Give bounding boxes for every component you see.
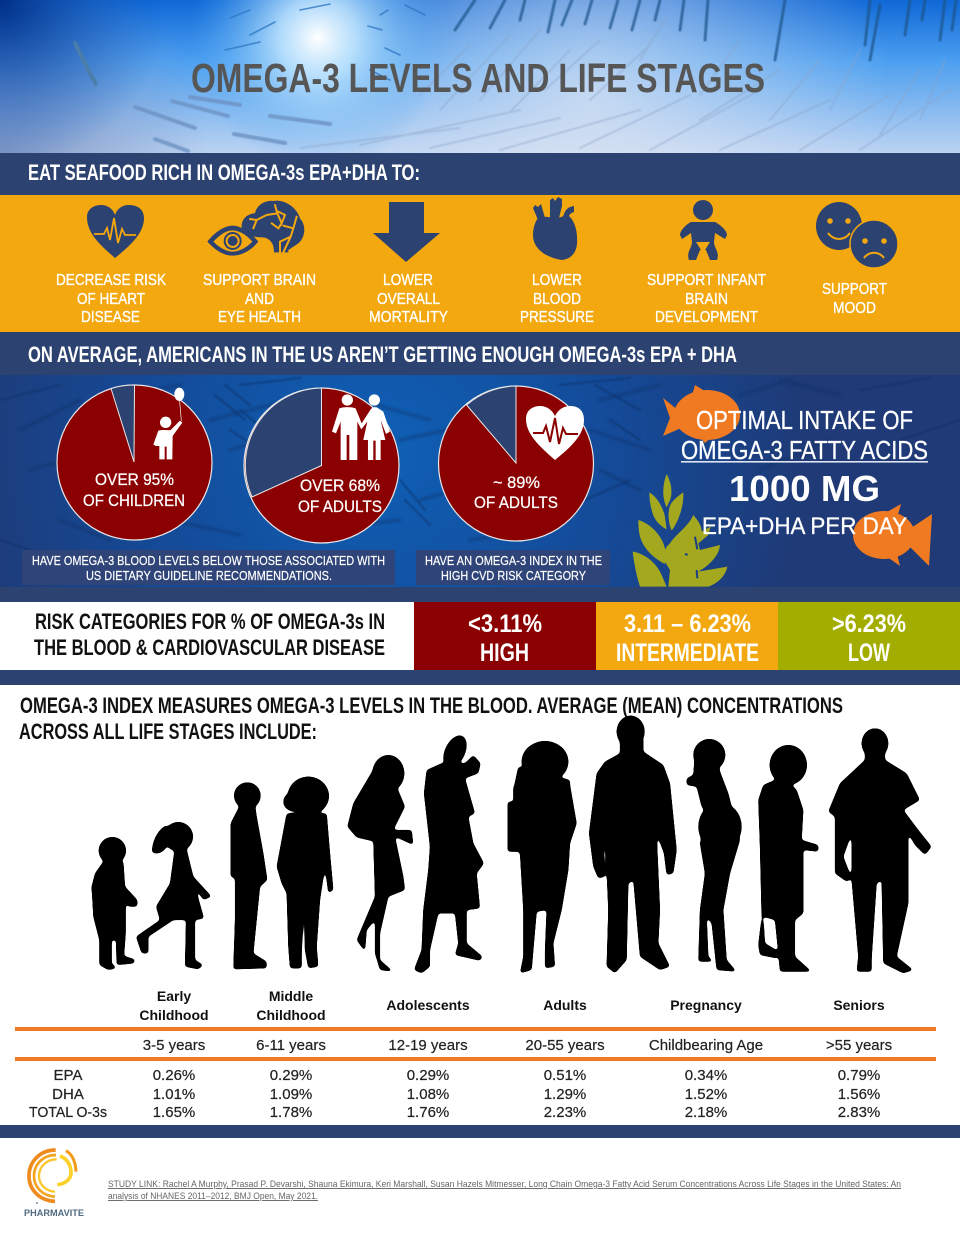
panel: risk categories: [0, 602, 960, 670]
table row: DHA: 1.29%: [544, 1086, 586, 1103]
heading: omega-3 index: [19, 693, 843, 744]
icon: down arrow: [373, 202, 440, 262]
table row: DHA: 1.52%: [685, 1086, 727, 1103]
benefit label: heart disease: OF HEART: [77, 291, 145, 308]
risk cell: intermediate: 3.11 – 6.23%: [624, 610, 751, 638]
icon: brain and eye: [207, 201, 304, 256]
risk cell: intermediate: INTERMEDIATE: [616, 639, 759, 667]
benefit label: mortality: OVERALL: [377, 291, 440, 308]
silhouettes: children and adolescents: [92, 732, 484, 973]
risk cell: low: LOW: [848, 639, 890, 667]
silhouettes: adults, pregnancy and seniors: [508, 716, 932, 973]
table row: DHA: 1.56%: [838, 1086, 880, 1103]
table row: total omega-3s: 1.65%: [153, 1104, 195, 1121]
icon: anatomical heart: [533, 197, 577, 260]
silhouette: pregnant woman: [687, 739, 742, 972]
icon: seaweed: [633, 474, 727, 587]
table row: EPA: 0.51%: [544, 1067, 586, 1084]
table ages row: 3-5 years: [143, 1037, 205, 1054]
table header: Childhood: [139, 1007, 209, 1023]
table ages row: 6-11 years: [256, 1037, 326, 1054]
pie: about 89% of adults: OF ADULTS: [474, 493, 558, 512]
caption: omega-3 index: [416, 550, 610, 585]
study link citation: analysis of NHANES 2011–2012, BMJ Open, May 2021.: [108, 1191, 318, 1202]
pie: over 95% of children: [57, 385, 212, 540]
table row: DHA: 1.08%: [407, 1086, 449, 1103]
table row: EPA: 0.79%: [838, 1067, 880, 1084]
benefit label: heart disease: DECREASE RISK: [56, 272, 166, 289]
table row: EPA: [54, 1067, 880, 1084]
table ages row: >55 years: [826, 1037, 892, 1054]
optimal intake callout: OPTIMAL INTAKE OF: [696, 405, 913, 435]
table row: EPA: 0.29%: [270, 1067, 312, 1084]
silhouette: senior man: [828, 728, 932, 973]
table ages row: 12-19 years: [388, 1037, 468, 1054]
table ages row: [143, 1037, 892, 1054]
benefit label: brain and eye: SUPPORT BRAIN: [203, 272, 316, 289]
icon: baby: [680, 200, 727, 260]
table header: Middle: [269, 988, 313, 1004]
table row: DHA: [52, 1086, 880, 1103]
risk cell: high: HIGH: [480, 639, 529, 667]
icon: orange fish top: [663, 385, 740, 443]
icon: happy and sad faces: [816, 202, 898, 268]
icon: couple: [332, 394, 390, 460]
silhouette: toddler: [92, 837, 137, 970]
benefit label: mood: MOOD: [833, 300, 876, 317]
benefit label: infant development: BRAIN: [685, 291, 728, 308]
logo: Pharmavite: [24, 1150, 84, 1219]
pie: over 95% of children: OF CHILDREN: [83, 491, 185, 510]
pie: over 68% of adults: OF ADULTS: [298, 497, 382, 516]
table header: Early: [157, 988, 191, 1004]
silhouette: senior woman: [758, 745, 818, 972]
header banner: [0, 0, 960, 153]
table row: EPA: 0.26%: [153, 1067, 195, 1084]
band: separator: [0, 670, 960, 685]
table row: total omega-3s: 2.83%: [838, 1104, 880, 1121]
benefit label: heart disease: [56, 272, 166, 326]
benefit label: mortality: LOWER: [383, 272, 433, 289]
band: eat seafood heading: [0, 153, 960, 195]
table row: total omega-3s: TOTAL O-3s: [29, 1104, 107, 1121]
risk cell: intermediate: [596, 602, 778, 670]
band: separator: [0, 587, 960, 602]
table row: total omega-3s: [29, 1104, 880, 1121]
silhouette: boy: [231, 782, 267, 969]
pie: over 68% of adults: [244, 388, 399, 543]
table row: DHA: 1.09%: [270, 1086, 312, 1103]
silhouette: adult woman: [508, 741, 577, 973]
table row: total omega-3s: 2.18%: [685, 1104, 727, 1121]
logo: Pharmavite: PHARMAVITE: [24, 1208, 84, 1219]
table header: Pregnancy: [670, 997, 742, 1013]
benefit label: blood pressure: [520, 272, 594, 326]
table ages row: 20-55 years: [525, 1037, 605, 1054]
table row: DHA: DHA: [52, 1086, 84, 1103]
panel: risk categories: RISK CATEGORIES FOR % OF OMEGA-3s IN: [35, 609, 385, 634]
benefit label: blood pressure: LOWER: [532, 272, 582, 289]
caption: blood levels: [22, 550, 395, 585]
panel: benefits: [0, 195, 960, 332]
silhouette: young girl: [136, 822, 212, 969]
panel: ocean statistics: [0, 375, 960, 587]
benefit label: mortality: [369, 272, 448, 326]
band: footer divider: [0, 1125, 960, 1138]
benefit label: brain and eye: AND: [245, 291, 274, 308]
benefit label: mood: SUPPORT: [822, 281, 887, 298]
table row: EPA: 0.34%: [685, 1067, 727, 1084]
pie: about 89% of adults: ~ 89%: [493, 473, 540, 492]
benefit label: mood: [822, 281, 887, 317]
caption: omega-3 index: HAVE AN OMEGA-3 INDEX IN THE: [425, 554, 602, 568]
pie: over 68% of adults: OVER 68%: [300, 476, 380, 495]
optimal intake callout: [681, 405, 928, 540]
optimal intake callout: 1000 MG: [729, 468, 880, 509]
table row: EPA: 0.29%: [407, 1067, 449, 1084]
risk cell: low: [778, 602, 960, 670]
benefit label: brain and eye: [203, 272, 316, 326]
table ages row: Childbearing Age: [649, 1037, 763, 1054]
silhouette: older girl: [277, 777, 333, 968]
table row: total omega-3s: 1.76%: [407, 1104, 449, 1121]
band: americans not getting enough: ON AVERAGE, AMERICANS IN THE US AREN’T GETTING ENOUGH OMEGA-3s EPA + DHA: [28, 342, 737, 367]
table header: Adults: [543, 997, 587, 1013]
pie: about 89% of adults: [438, 386, 594, 541]
benefit label: mortality: MORTALITY: [369, 309, 448, 326]
icon: child with balloon: [153, 388, 184, 459]
table header: Adolescents: [386, 997, 470, 1013]
table header: Childhood: [256, 1007, 326, 1023]
study link citation: [108, 1179, 901, 1202]
benefit label: brain and eye: EYE HEALTH: [218, 309, 301, 326]
heading: omega-3 index: ACROSS ALL LIFE STAGES INCLUDE:: [19, 719, 317, 744]
silhouette: adolescent girl: [347, 755, 413, 972]
table row: DHA: 1.01%: [153, 1086, 195, 1103]
benefit label: infant development: DEVELOPMENT: [655, 309, 758, 326]
silhouette: adult man: [589, 716, 677, 973]
optimal intake callout: EPA+DHA PER DAY: [702, 513, 907, 540]
benefit label: heart disease: DISEASE: [81, 309, 140, 326]
table header: Seniors: [833, 997, 885, 1013]
icon: orange fish bottom: [853, 504, 932, 566]
icon: heart with pulse: [87, 205, 144, 258]
silhouette: adolescent boy: [414, 732, 484, 973]
table header: [139, 988, 885, 1023]
benefit label: infant development: SUPPORT INFANT: [647, 272, 766, 289]
table: mean concentrations by life stage: [15, 988, 936, 1121]
panel: risk categories: THE BLOOD & CARDIOVASCULAR DISEASE: [34, 635, 385, 660]
band: americans not getting enough: [0, 332, 960, 375]
pie: over 95% of children: OVER 95%: [95, 470, 174, 489]
table row: total omega-3s: 2.23%: [544, 1104, 586, 1121]
benefit label: blood pressure: BLOOD: [533, 291, 581, 308]
icon: white heart with pulse: [526, 406, 584, 460]
risk cell: high: [414, 602, 596, 670]
benefit label: infant development: [647, 272, 766, 326]
risk cell: low: >6.23%: [832, 610, 906, 638]
table row: total omega-3s: 1.78%: [270, 1104, 312, 1121]
benefit label: blood pressure: PRESSURE: [520, 309, 594, 326]
caption: blood levels: US DIETARY GUIDELINE RECOMMENDATIONS.: [86, 569, 332, 583]
band: eat seafood heading: EAT SEAFOOD RICH IN OMEGA-3s EPA+DHA TO:: [28, 160, 420, 185]
caption: blood levels: HAVE OMEGA-3 BLOOD LEVELS BELOW THOSE ASSOCIATED WITH: [32, 554, 385, 568]
risk cell: high: <3.11%: [468, 610, 542, 638]
caption: omega-3 index: HIGH CVD RISK CATEGORY: [441, 569, 587, 583]
table row: EPA: EPA: [54, 1067, 82, 1084]
title: OMEGA-3 LEVELS AND LIFE STAGES: [191, 55, 765, 101]
